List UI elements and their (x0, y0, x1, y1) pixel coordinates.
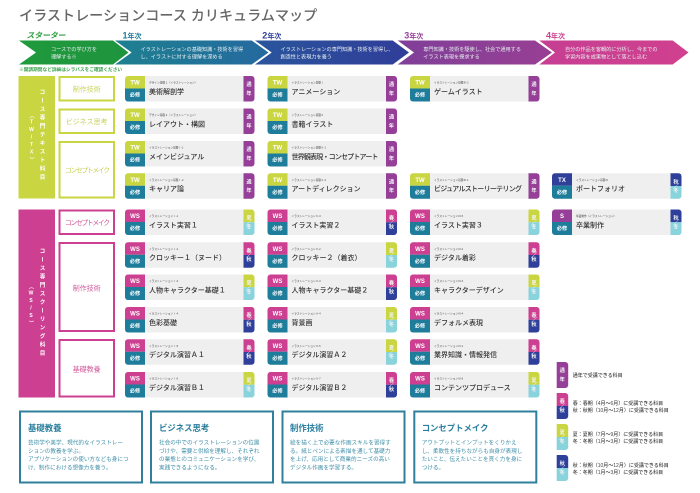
course card: 美術解剖学 (125, 76, 254, 102)
stage arrow: year 2: 創造性と表現力を養う (280, 53, 332, 61)
legend item: spring and autumn: 春 (560, 397, 566, 405)
course card: 人物キャラクター基礎2: イラストレーションⅡ-3 (292, 279, 321, 283)
course card: キャラクターデザイン: WS (415, 279, 425, 285)
course card: クロッキー2: 冬 (389, 255, 395, 263)
course card: キャラクターデザイン: 夏 (531, 280, 537, 287)
course card: キャラクターデザイン (410, 274, 540, 300)
course card: デジタル演習A2 (268, 339, 397, 365)
course card: ゲームイラスト: 必修 (415, 91, 426, 99)
stage arrow: year 1: 1年次 (122, 30, 142, 40)
course card: レイアウト・構図: 通 (246, 113, 252, 121)
category: concept (schooling track) (60, 210, 114, 234)
course card: ゲームイラスト: イラストレーション基礎Ⅲ-2 (434, 81, 469, 85)
course card: コンテンツプロデュース: イラストレーションⅢ-6 (434, 377, 464, 381)
course card: イラスト実習3: 夏 (531, 215, 537, 222)
course card: レイアウト・構図: TW (130, 113, 140, 119)
course card: イラスト実習1: 夏 (246, 215, 252, 222)
stage arrow: starter (19, 31, 128, 64)
legend item: spring and autumn: 春：春期（4月～6月）に受講できる科目 (573, 400, 663, 407)
course card: メインビジュアル: 通 (246, 145, 252, 153)
panel: 基礎教養 description: け、制作における想像力を養う。 (28, 464, 111, 472)
category: business (text track) (60, 110, 114, 133)
course card: 業界知識・情報発信: WS (415, 344, 425, 350)
stage arrow: year 4 (539, 30, 688, 64)
course card: 業界知識・情報発信 (410, 339, 540, 365)
course card: デジタル演習A1: 秋 (246, 352, 252, 360)
panel: 基礎教養 description: ションの教養を学ぶ。 (28, 447, 84, 455)
course card: 美術解剖学: TW (130, 80, 140, 86)
stage arrow: year 2 (255, 30, 409, 64)
legend item: autumn and winter: 秋：秋期（10月～12月）に受講できる科目 (573, 462, 669, 469)
course card: デジタル演習B1: 冬 (246, 385, 252, 393)
course card: メインビジュアル: TW (130, 146, 140, 152)
panel: 基礎教養 description: アプリケーションの使い方なども身につ (28, 455, 129, 463)
stage arrow: year 3: 3年次 (404, 30, 423, 40)
panel: ビジネス思考 description: ビジネス思考 (159, 423, 209, 433)
course card: メインビジュアル: 必修 (130, 156, 141, 164)
course card: メインビジュアル (125, 141, 254, 166)
course card: デジタル演習B1: WS (130, 376, 140, 382)
course card: デジタル着彩: イラストレーションⅢ-2 (434, 247, 464, 251)
course card: デジタル着彩: 春 (531, 247, 537, 255)
course card: 人物キャラクター基礎1 (125, 274, 254, 300)
panel: 基礎教養 description: 芸術学や美学、現代的なイラストレー (28, 438, 123, 446)
course card: 人物キャラクター基礎1: イラストレーションⅠ-3 (149, 279, 179, 283)
panel: ビジネス思考 description: づけや、需要と供給を理解し、それぞれ (159, 447, 260, 455)
course card: 卒業制作 (552, 210, 682, 235)
category: production (schooling track): 制作技術 (73, 284, 101, 292)
course card: ポートフォリオ: 必修 (557, 188, 568, 196)
stage arrow: year 3: イラスト表現を探求する (423, 53, 480, 61)
course card: メインビジュアル: 年 (246, 154, 252, 162)
stage arrow: year 4: 自分の作品を客観的に分析し、今までの (565, 45, 658, 53)
course card: キャラクターデザイン: 必修 (415, 289, 426, 297)
panel: コンセプトメイク description: コンセプトメイク (422, 423, 489, 433)
panel: ビジネス思考 description: 社会の中でのイラストレーションの位置 (159, 438, 260, 446)
category: concept (schooling track): コンセプトメイク (65, 219, 110, 227)
stage arrow: year 3: 専門知識・技術を駆使し、社会で通用する (423, 45, 521, 53)
legend item: full year (557, 362, 623, 388)
panel: text course track (18, 76, 55, 198)
course card: アートディレクション: 通 (389, 178, 395, 186)
course card: 世界観表現・コンセプトアート: 年 (389, 154, 394, 162)
course card: デジタル演習B2: イラストレーションⅡ-7 (292, 377, 321, 381)
course card: イラスト実習1: イラストレーションⅠ-1 (149, 214, 179, 218)
course card: デジタル演習B2: WS (273, 376, 282, 382)
course card: 色彩基礎 (125, 307, 254, 332)
course card: クロッキー1: クロッキー１（ヌード） (149, 254, 226, 262)
course card: キャラクターデザイン: キャラクターデザイン (434, 285, 504, 294)
course card: ポートフォリオ: 冬 (673, 186, 679, 194)
course card: ポートフォリオ: イラストレーション基礎Ⅳ (576, 178, 608, 182)
course card: 書籍イラスト: 通 (389, 113, 395, 121)
course card: クロッキー2: 夏 (389, 248, 395, 255)
course card: デジタル演習A1: 必修 (130, 354, 141, 362)
course card: アニメーション: 通 (389, 80, 395, 88)
course card: イラスト実習2: イラストレーションⅡ-3 (292, 214, 321, 218)
stage arrow: year 1: イラストレーションの基礎知識・技術を習得 (140, 45, 243, 53)
course card: 世界観表現・コンセプトアート: 世界観表現・コンセプトアート (292, 152, 378, 161)
panel: 制作技術 description (282, 412, 404, 482)
course card: クロッキー1: 春 (246, 247, 252, 255)
course card: 人物キャラクター基礎1: 必修 (130, 289, 141, 297)
course card: イラスト実習2: 秋 (389, 222, 395, 230)
course card: 世界観表現・コンセプトアート: TW (273, 146, 283, 152)
course card: デジタル演習B1 (125, 372, 254, 398)
title: イラストレーションコース カリキュラムマップ (19, 8, 317, 24)
course card: ゲームイラスト: ゲームイラスト (434, 87, 483, 96)
course card: デジタル演習B2 (268, 372, 397, 398)
category: foundation (schooling track): 基礎教養 (73, 364, 101, 374)
category: production (text track): 制作技術 (73, 84, 101, 93)
course card: デジタル演習A2: 冬 (389, 352, 395, 360)
course card: コンテンツプロデュース: WS (415, 376, 425, 382)
course card: ポートフォリオ: TX (558, 178, 566, 184)
course card: イラスト実習2 (268, 210, 397, 235)
course card: デジタル演習A2: デジタル演習Ａ２ (292, 350, 347, 359)
panel: コンセプトメイク description (414, 412, 536, 482)
legend item: spring and autumn: 秋：秋期（10月～12月）に受講できる科目 (573, 407, 669, 414)
course card: ポートフォリオ: ポートフォリオ (576, 185, 625, 193)
course card: コンテンツプロデュース: 夏 (531, 377, 537, 384)
course card: 人物キャラクター基礎2: 秋 (389, 287, 395, 295)
course card: 卒業制作: 秋 (673, 214, 679, 222)
legend item: autumn and winter: 冬：冬期（1月～3月）に受講できる科目 (573, 469, 663, 476)
course card: 書籍イラスト (268, 108, 397, 134)
panel: text course track: （TW/TX） (28, 113, 34, 164)
course card: アニメーション: アニメーション (292, 88, 340, 96)
legend item: full year: 年 (560, 375, 565, 383)
course card: デジタル演習B1: 必修 (130, 387, 141, 395)
course card: イラスト実習2: イラスト実習２ (292, 220, 340, 229)
course card: 背景画 (268, 307, 397, 332)
course card: 書籍イラスト: イラストレーション基礎Ⅱ (292, 113, 324, 117)
course card: デフォルメ表現: WS (415, 312, 425, 318)
course card: クロッキー2: イラストレーションⅡ-2 (292, 247, 321, 251)
course card: 美術解剖学: デザイン基礎１（イラストレーション） (149, 81, 197, 85)
course card: イラスト実習3 (410, 210, 540, 235)
course card: 背景画: WS (273, 312, 282, 318)
course card: 世界観表現・コンセプトアート: 必修 (272, 156, 283, 164)
stage arrow: starter: コースでの学び方を (51, 45, 97, 53)
course card: デジタル演習B2: デジタル演習Ｂ２ (292, 383, 347, 392)
course card: 業界知識・情報発信: 必修 (415, 354, 426, 362)
course card: 美術解剖学: 年 (246, 89, 252, 97)
course card: 人物キャラクター基礎1: 夏 (246, 280, 252, 287)
course card: 美術解剖学: 美術解剖学 (149, 87, 184, 96)
stage arrow: year 2: イラストレーションの専門知識・技術を習得し、 (280, 45, 393, 53)
category: production (schooling track) (60, 243, 114, 331)
course card: アートディレクション: イラストレーション基礎Ⅱ-2 (292, 178, 327, 182)
course card: クロッキー1: 必修 (130, 257, 141, 265)
course card: デジタル演習A2: 必修 (272, 354, 283, 362)
stage arrow: starter: 理解する※ (51, 53, 77, 61)
course card: キャリア論: イラストレーション基礎Ⅰ-2 (149, 178, 184, 182)
panel: schooling course track (18, 210, 55, 398)
course card: クロッキー1: WS (130, 247, 140, 253)
course card: ビジュアルストーリーテリング: イラストレーション基礎Ⅲ-1 (434, 178, 469, 182)
category: business (text track): ビジネス思考 (66, 117, 108, 126)
course card: クロッキー2: クロッキー２（着衣） (292, 253, 362, 262)
course card: デジタル着彩: デジタル着彩 (434, 253, 476, 262)
course card: コンテンツプロデュース: 冬 (531, 385, 537, 393)
legend item: summer and winter: 冬：冬期（1月～3月）に受講できる科目 (573, 438, 663, 445)
panel: 制作技術 description: デジタル作画を学習する。 (290, 464, 357, 472)
legend item: summer and winter: 夏：夏期（7月～9月）に受講できる科目 (573, 431, 663, 438)
category: production (text track) (60, 77, 114, 100)
course card: アートディレクション: 年 (389, 186, 394, 194)
legend item: autumn and winter: 秋 (560, 459, 566, 467)
legend item: summer and winter: 夏 (560, 429, 566, 436)
course card: ポートフォリオ (552, 173, 682, 199)
panel: text course track: コース専門テキスト科目 (38, 89, 45, 182)
course card: 背景画: 背景画 (292, 318, 312, 327)
course card: イラスト実習1: 必修 (130, 224, 141, 232)
course card: イラスト実習3: イラスト実習３ (434, 220, 483, 229)
course card: 色彩基礎: 春 (246, 311, 252, 319)
course card: 卒業制作: 冬 (673, 222, 679, 230)
course card: コンテンツプロデュース (410, 372, 540, 398)
course card: 卒業制作: 卒業制作 (576, 220, 604, 229)
course card: デジタル着彩: WS (415, 247, 425, 253)
course card: デフォルメ表現: デフォルメ表現 (434, 318, 483, 327)
course card: 世界観表現・コンセプトアート: 通 (389, 145, 395, 153)
course card: デジタル演習B1: 夏 (246, 377, 252, 384)
course card: ゲームイラスト: TW (415, 80, 425, 86)
course card: 人物キャラクター基礎2: 春 (389, 279, 395, 287)
course card: メインビジュアル: メインビジュアル (149, 152, 204, 161)
stage arrow: year 3 (398, 30, 552, 64)
course card: 色彩基礎: WS (130, 312, 140, 318)
course card: アニメーション: 必修 (272, 91, 283, 99)
course card: 世界観表現・コンセプトアート (268, 141, 397, 166)
note: syllabus: ※開講期間など詳細はシラバスをご確認ください (19, 66, 122, 73)
course card: デジタル演習B1: イラストレーションⅠ-6 (149, 377, 179, 381)
course card: イラスト実習1 (125, 210, 254, 235)
course card: クロッキー2: WS (273, 247, 282, 253)
course card: イラスト実習3: WS (415, 214, 425, 220)
legend item: spring and autumn (557, 393, 669, 419)
course card: キャラクターデザイン: イラストレーションⅢ-3 (434, 279, 464, 283)
course card: ビジュアルストーリーテリング: 通 (531, 178, 537, 186)
course card: 美術解剖学: 通 (246, 80, 252, 88)
course card: 書籍イラスト: 必修 (272, 123, 283, 131)
category: concept (text track): コンセプトメイク (65, 167, 110, 175)
course card: デフォルメ表現: イラストレーションⅢ-4 (434, 312, 464, 316)
course card: デジタル着彩 (410, 242, 540, 268)
course card: 卒業制作: 必修 (557, 224, 568, 232)
course card: イラスト実習1: WS (130, 214, 140, 220)
course card: 業界知識・情報発信: 秋 (531, 352, 537, 360)
panel: コンセプトメイク description: たいこと、伝えたいことを貫く力を身に (422, 455, 523, 463)
course card: デジタル演習A2: イラストレーションⅡ-5 (292, 344, 321, 348)
course card: 背景画: 必修 (272, 322, 283, 330)
course card: 業界知識・情報発信: 春 (531, 343, 537, 351)
course card: デジタル演習A1: 春 (246, 343, 252, 351)
course card: イラスト実習3: 必修 (415, 224, 426, 232)
course card: デジタル演習A2: WS (273, 344, 282, 350)
course card: 人物キャラクター基礎1: 人物キャラクター基礎１ (149, 285, 226, 294)
panel: 制作技術 description: る。紙とペンによる素描を通して基礎力 (290, 447, 391, 455)
category: concept (text track) (60, 142, 114, 198)
course card: デフォルメ表現: 春 (531, 311, 537, 319)
course card: ビジュアルストーリーテリング: TW (415, 178, 425, 184)
legend item: summer and winter: 冬 (560, 437, 566, 445)
course card: デジタル演習A1 (125, 339, 254, 365)
course card: デジタル演習B2: 秋 (389, 385, 395, 393)
course card: ビジュアルストーリーテリング (410, 173, 540, 199)
course card: クロッキー1: 秋 (246, 255, 252, 263)
course card: キャリア論: キャリア論 (149, 184, 184, 193)
course card: 色彩基礎: 色彩基礎 (149, 318, 177, 327)
panel: 制作技術 description: 制作技術 (290, 423, 324, 433)
course card: デジタル演習B1: デジタル演習Ｂ１ (149, 383, 205, 392)
panel: schooling course track: コース専門スクーリング科目 (38, 248, 45, 358)
course card: クロッキー1: イラストレーションⅠ-2 (149, 247, 179, 251)
legend item: autumn and winter: 冬 (560, 468, 566, 476)
stage arrow: year 1 (115, 30, 268, 64)
panel: ビジネス思考 description: の業態とのコミュニケーションを学び、 (159, 455, 260, 463)
course card: レイアウト・構図: レイアウト・構図 (149, 119, 205, 128)
course card: デジタル演習A1: WS (130, 344, 140, 350)
course card: 世界観表現・コンセプトアート: イラストレーション基礎Ⅱ-1 (292, 146, 327, 150)
panel: コンセプトメイク description: つける。 (422, 465, 444, 472)
course card: メインビジュアル: イラストレーション基礎Ⅰ-1 (149, 146, 184, 150)
panel: コンセプトメイク description: し、柔軟性を持ちながらも自身が表現し (422, 447, 523, 455)
course card: デジタル着彩: 秋 (531, 255, 537, 263)
course card: アニメーション: 年 (389, 89, 394, 97)
course card: レイアウト・構図: 必修 (130, 123, 141, 131)
course card: キャリア論: 必修 (130, 188, 141, 196)
course card: デジタル演習A2: 夏 (389, 344, 395, 351)
course card: ゲームイラスト: 通 (531, 80, 537, 88)
legend item: autumn and winter (557, 455, 669, 481)
stage arrow: year 4: 4年次 (546, 30, 565, 40)
legend: semester tags (557, 362, 669, 481)
course card: レイアウト・構図: 年 (246, 121, 252, 129)
stage arrow: year 2: 2年次 (262, 30, 281, 40)
legend item: summer and winter (557, 424, 663, 450)
course card: 人物キャラクター基礎2: 人物キャラクター基礎２ (292, 285, 368, 294)
course card: イラスト実習2: WS (273, 214, 282, 220)
course card: デジタル演習A1: デジタル演習Ａ１ (149, 350, 205, 359)
course card: デジタル演習B2: 春 (389, 376, 395, 384)
course card: キャラクターデザイン: 冬 (531, 287, 537, 295)
course card: アニメーション: イラストレーション基礎Ⅰ (292, 81, 324, 85)
panel: ビジネス思考 description: 実践できるようになる。 (159, 464, 220, 472)
course card: キャリア論: 年 (246, 186, 252, 194)
course card: クロッキー2: 必修 (272, 257, 283, 265)
legend item: full year: 通年で受講できる科目 (573, 372, 623, 379)
panel: 基礎教養 description (20, 412, 142, 482)
course card: ビジュアルストーリーテリング: ビジュアルストーリーテリング (434, 184, 522, 193)
course card: クロッキー1 (125, 242, 254, 268)
course card: アートディレクション: TW (273, 178, 283, 184)
course card: アニメーション: TW (273, 80, 283, 86)
timeline: stage arrows (19, 30, 688, 64)
course card: レイアウト・構図: デザイン基礎２（イラストレーション） (149, 113, 197, 117)
course card: 業界知識・情報発信: 業界知識・情報発信 (434, 350, 497, 359)
course card: アートディレクション: 必修 (272, 188, 283, 196)
course card: キャリア論: TW (130, 178, 140, 184)
course card: アートディレクション: アートディレクション (292, 184, 361, 193)
course card: 色彩基礎: イラストレーションⅠ-4 (149, 312, 179, 316)
course card: デジタル演習A1: イラストレーションⅠ-5 (149, 344, 179, 348)
course card: デフォルメ表現: 必修 (415, 322, 426, 330)
panel: ビジネス思考 description (151, 412, 273, 482)
course card: 人物キャラクター基礎1: 冬 (246, 287, 252, 295)
panel: 制作技術 description: を上げ、応用として商業的ニーズの高い (290, 455, 390, 463)
course card: レイアウト・構図 (125, 108, 254, 134)
panel: 制作技術 description: 絵を描く上で必要な作画スキルを習得す (290, 438, 391, 446)
legend item: full year: 通 (560, 366, 566, 374)
course card: 背景画: 夏 (389, 312, 395, 319)
course card: キャリア論: 通 (246, 178, 252, 186)
course card: デフォルメ表現: 秋 (531, 320, 537, 328)
course card: 業界知識・情報発信: イラストレーションⅢ-1 (434, 344, 464, 348)
panel: 基礎教養 description: 基礎教養 (28, 423, 62, 433)
course card: 人物キャラクター基礎2: WS (273, 279, 282, 285)
course card: デジタル演習B2: 必修 (272, 387, 283, 395)
course card: コンテンツプロデュース: 必修 (415, 387, 426, 395)
stage arrow: year 1: し、イラストに対する理解を深める (140, 53, 223, 61)
course card: 色彩基礎: 秋 (246, 320, 252, 328)
course card: デジタル着彩: 必修 (415, 257, 426, 265)
stage arrow: year 4: 学習内容を成果物として落とし込む (565, 53, 647, 61)
course card: アニメーション (268, 76, 397, 102)
course card: イラスト実習3: 冬 (531, 222, 537, 230)
course card: ビジュアルストーリーテリング: 必修 (415, 188, 426, 196)
course card: ゲームイラスト: 年 (531, 89, 537, 97)
course card: 背景画: 冬 (389, 320, 395, 328)
course card: 背景画: イラストレーションⅡ-4 (292, 312, 321, 316)
legend item: spring and autumn: 秋 (560, 406, 566, 414)
course card: 人物キャラクター基礎1: WS (130, 279, 140, 285)
course card: 人物キャラクター基礎2 (268, 274, 397, 300)
panel: schooling course track: （WS/S） (28, 284, 34, 327)
course card: イラスト実習2: 必修 (272, 224, 283, 232)
course card: 書籍イラスト: TW (273, 113, 283, 119)
course card: デフォルメ表現 (410, 307, 540, 332)
course card: イラスト実習2: 春 (389, 214, 395, 222)
course card: クロッキー2 (268, 242, 397, 268)
course card: イラスト実習1: イラスト実習１ (149, 220, 198, 229)
course card: イラスト実習3: イラストレーションⅢ-5 (434, 214, 464, 218)
course card: 卒業制作: S (560, 214, 564, 220)
course card: 美術解剖学: 必修 (130, 91, 141, 99)
course card: コンテンツプロデュース: コンテンツプロデュース (434, 383, 511, 392)
course card: キャリア論 (125, 173, 254, 199)
course card: 人物キャラクター基礎2: 必修 (272, 289, 283, 297)
course card: イラスト実習1: 冬 (246, 222, 252, 230)
course card: ゲームイラスト (410, 76, 540, 102)
course card: ビジュアルストーリーテリング: 年 (531, 186, 537, 194)
category: foundation (schooling track) (60, 340, 114, 396)
course card: アートディレクション (268, 173, 397, 199)
course card: 卒業制作: 卒業制作（イラストレーション） (576, 214, 616, 218)
stage arrow: starter: スターター (26, 31, 66, 40)
course card: 書籍イラスト: 書籍イラスト (292, 119, 333, 128)
panel: コンセプトメイク description: アウトプットとインプットをくりかえ (422, 438, 517, 446)
course card: 書籍イラスト: 年 (389, 121, 394, 129)
course card: 色彩基礎: 必修 (130, 322, 141, 330)
course card: ポートフォリオ: 秋 (673, 178, 679, 186)
